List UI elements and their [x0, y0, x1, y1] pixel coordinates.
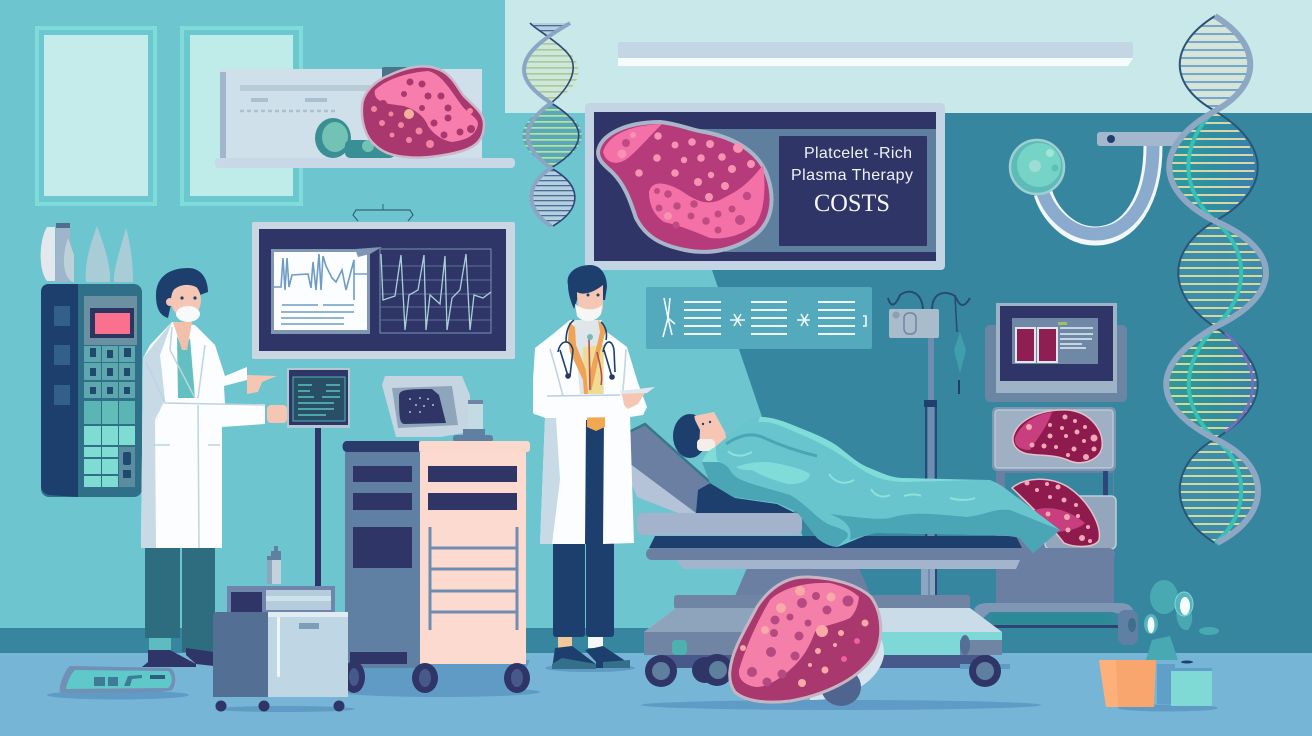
shirt and lanyard: [573, 320, 604, 394]
bottles on machine: [41, 223, 133, 282]
shelf with sign and liver model: [215, 66, 515, 168]
title box: Plasma Therapy: [791, 167, 913, 184]
pot: [1099, 660, 1156, 707]
bottom liver model: [641, 577, 1041, 710]
bed platform: [644, 595, 1010, 687]
patient bed: [629, 412, 1115, 687]
pole behind equipment and front cart: [213, 546, 355, 712]
box: [1157, 664, 1175, 704]
cart drawers: [350, 466, 517, 664]
bed base: [735, 568, 871, 596]
head: [156, 268, 208, 322]
sock and shoes: [149, 638, 171, 652]
lens: [1010, 140, 1064, 194]
info strip: [646, 287, 872, 349]
blanket main: [702, 417, 1060, 553]
liver on shelf: [362, 66, 484, 158]
IV stand: [888, 292, 970, 595]
bottle: [267, 546, 281, 584]
DNA lobes rungs: [1180, 16, 1250, 111]
headrest: [629, 425, 710, 515]
IV box: [889, 309, 939, 338]
doctor centre: [533, 265, 655, 672]
blanket highlights: [758, 417, 975, 482]
ceiling light: [618, 42, 1133, 66]
DNA grey strand: [1166, 16, 1266, 543]
bed wheels: [645, 655, 677, 687]
medical cart: [340, 441, 540, 697]
stethoscope: [558, 320, 615, 377]
tablet and hand: [620, 387, 655, 397]
hand tablet: [287, 368, 350, 586]
strip icons: [663, 298, 866, 337]
shelf board: [215, 158, 515, 168]
ECG white panel: [271, 247, 382, 334]
right equipment: [974, 303, 1138, 645]
potted plant: [1099, 580, 1219, 712]
arms: [534, 395, 630, 418]
machine screen: [90, 308, 134, 338]
liver dots light: [618, 132, 755, 220]
hands: [247, 375, 277, 394]
title text: Platcelet -Rich: [804, 145, 912, 162]
IV bag: [954, 332, 966, 373]
trousers: [553, 540, 585, 637]
ECG monitor: [252, 204, 515, 359]
coat: [533, 320, 647, 544]
bed mattress and frame: [637, 513, 802, 535]
coat: [141, 322, 265, 548]
head of patient: [673, 412, 727, 458]
dots on bottom liver dark: [740, 586, 868, 687]
tray upper: [992, 407, 1116, 471]
cart ladder: [430, 527, 517, 630]
DNA navy strand: [1178, 16, 1258, 543]
table: [974, 603, 1134, 620]
green cell model: [315, 118, 395, 158]
blanket folds: [726, 435, 817, 456]
wall sign: [220, 69, 482, 159]
device on cart: [382, 376, 493, 442]
main wall screen: [585, 103, 945, 270]
DNA helix small: [522, 23, 582, 226]
control machine: [41, 284, 142, 497]
arm with tube and lens: [1010, 132, 1192, 236]
window right: [180, 26, 303, 206]
blanket lower shade: [702, 461, 848, 547]
liver dots dark: [622, 139, 751, 234]
cart body: [213, 612, 268, 697]
title box: [779, 136, 927, 246]
window left: [35, 26, 157, 206]
doctor left: [141, 268, 287, 667]
ECG dark graph: [380, 249, 491, 333]
title box: COSTS: [814, 190, 890, 217]
tray lower: [1045, 496, 1116, 549]
machine keypad: [84, 346, 135, 487]
head: [568, 265, 607, 321]
patient body: [696, 482, 795, 513]
scale pad: [47, 666, 189, 700]
monitor: [985, 303, 1127, 402]
liver lower tray: [1012, 479, 1099, 546]
pants: [145, 548, 180, 638]
cart wheels: [343, 661, 530, 693]
blanket: [702, 417, 1060, 553]
DNA helix large: [1166, 16, 1266, 543]
liver illustration on screen: [598, 122, 772, 252]
socks and shoes: [558, 637, 572, 648]
dots on bottom liver pink: [747, 592, 854, 686]
liver upper tray: [1013, 410, 1102, 463]
DNA teal strand: [1188, 113, 1241, 543]
DNA lobes: [531, 23, 570, 38]
leaves: [1144, 580, 1219, 664]
DNA purple accent: [1225, 333, 1253, 432]
